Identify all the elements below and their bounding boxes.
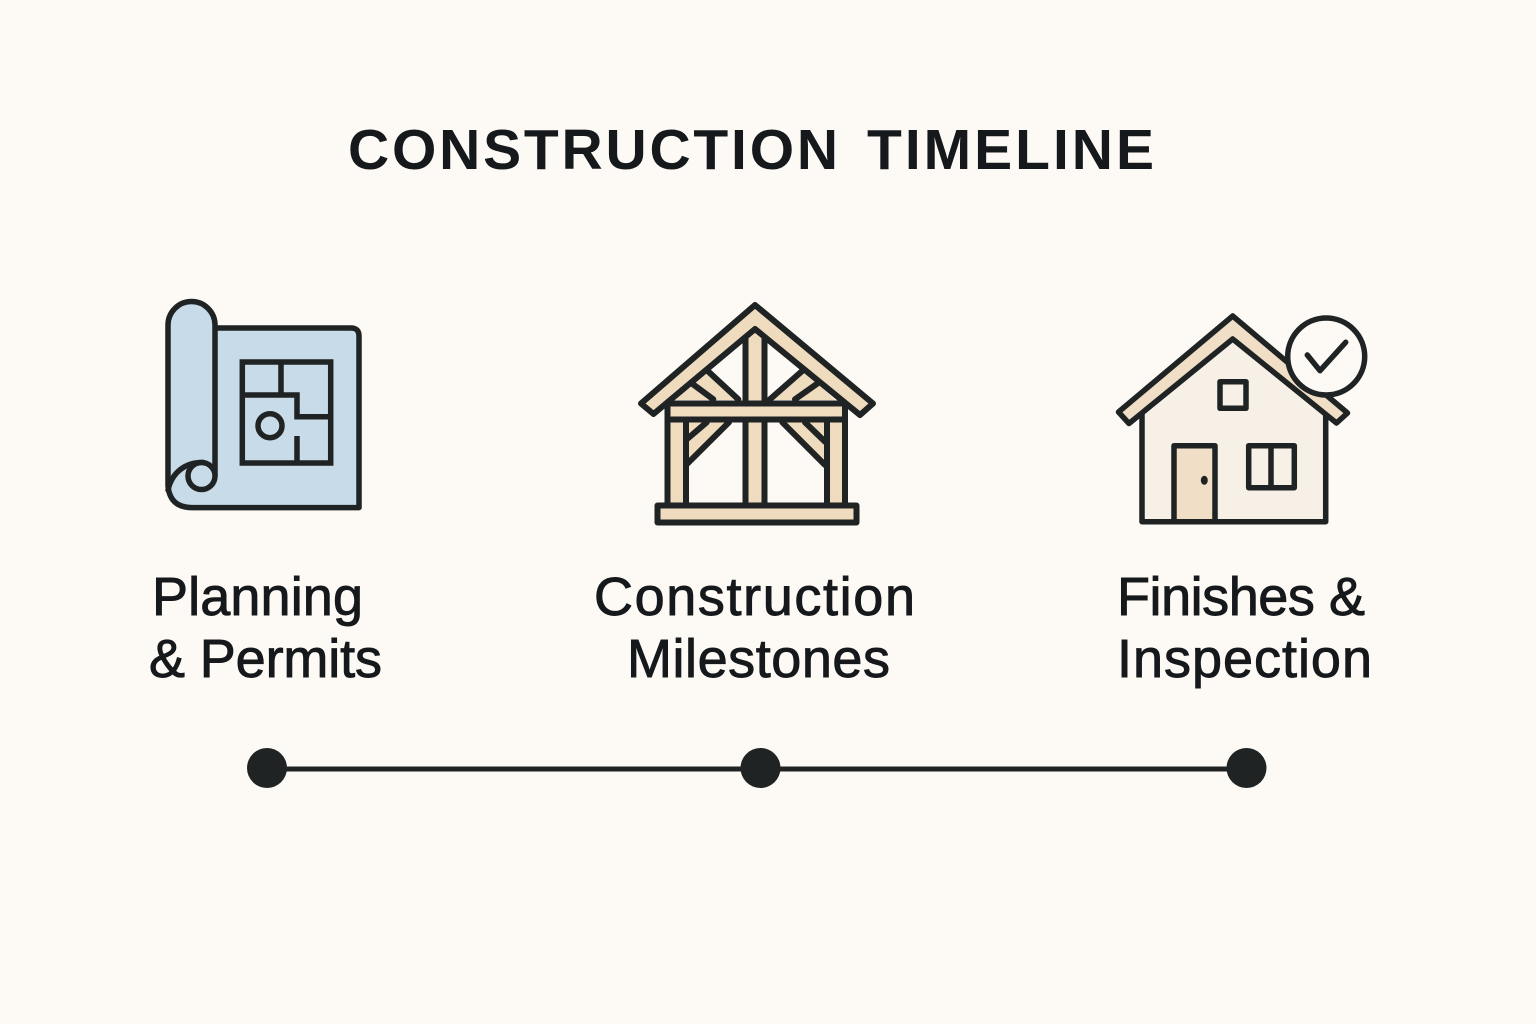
milestone dot 2 — [740, 748, 780, 788]
label: finishes and inspection: Inspection — [1117, 629, 1372, 689]
panel: finishes and inspection — [1117, 316, 1372, 689]
icon: blueprint roll with floor plan — [168, 302, 359, 508]
icon: finished house with check badge — [1118, 316, 1365, 522]
label: construction milestones: Construction — [594, 567, 915, 627]
timeline line — [267, 766, 1247, 772]
timeline — [247, 748, 1266, 788]
label: construction milestones: Milestones — [627, 629, 890, 689]
icon: timber house frame — [641, 305, 873, 522]
label: planning and permits: Planning — [152, 567, 363, 627]
title: TIMELINE — [867, 118, 1154, 182]
panel: planning and permits — [149, 302, 382, 689]
label: planning and permits — [149, 567, 382, 689]
milestone dot 3 — [1226, 748, 1266, 788]
title — [348, 118, 1154, 182]
label: finishes and inspection — [1117, 567, 1372, 689]
label: construction milestones — [594, 567, 915, 689]
title: CONSTRUCTION — [348, 118, 838, 182]
label: finishes and inspection: Finishes & — [1117, 567, 1365, 627]
panel: construction milestones — [594, 305, 915, 689]
milestone dot 1 — [247, 748, 287, 788]
label: planning and permits: & Permits — [149, 629, 382, 689]
